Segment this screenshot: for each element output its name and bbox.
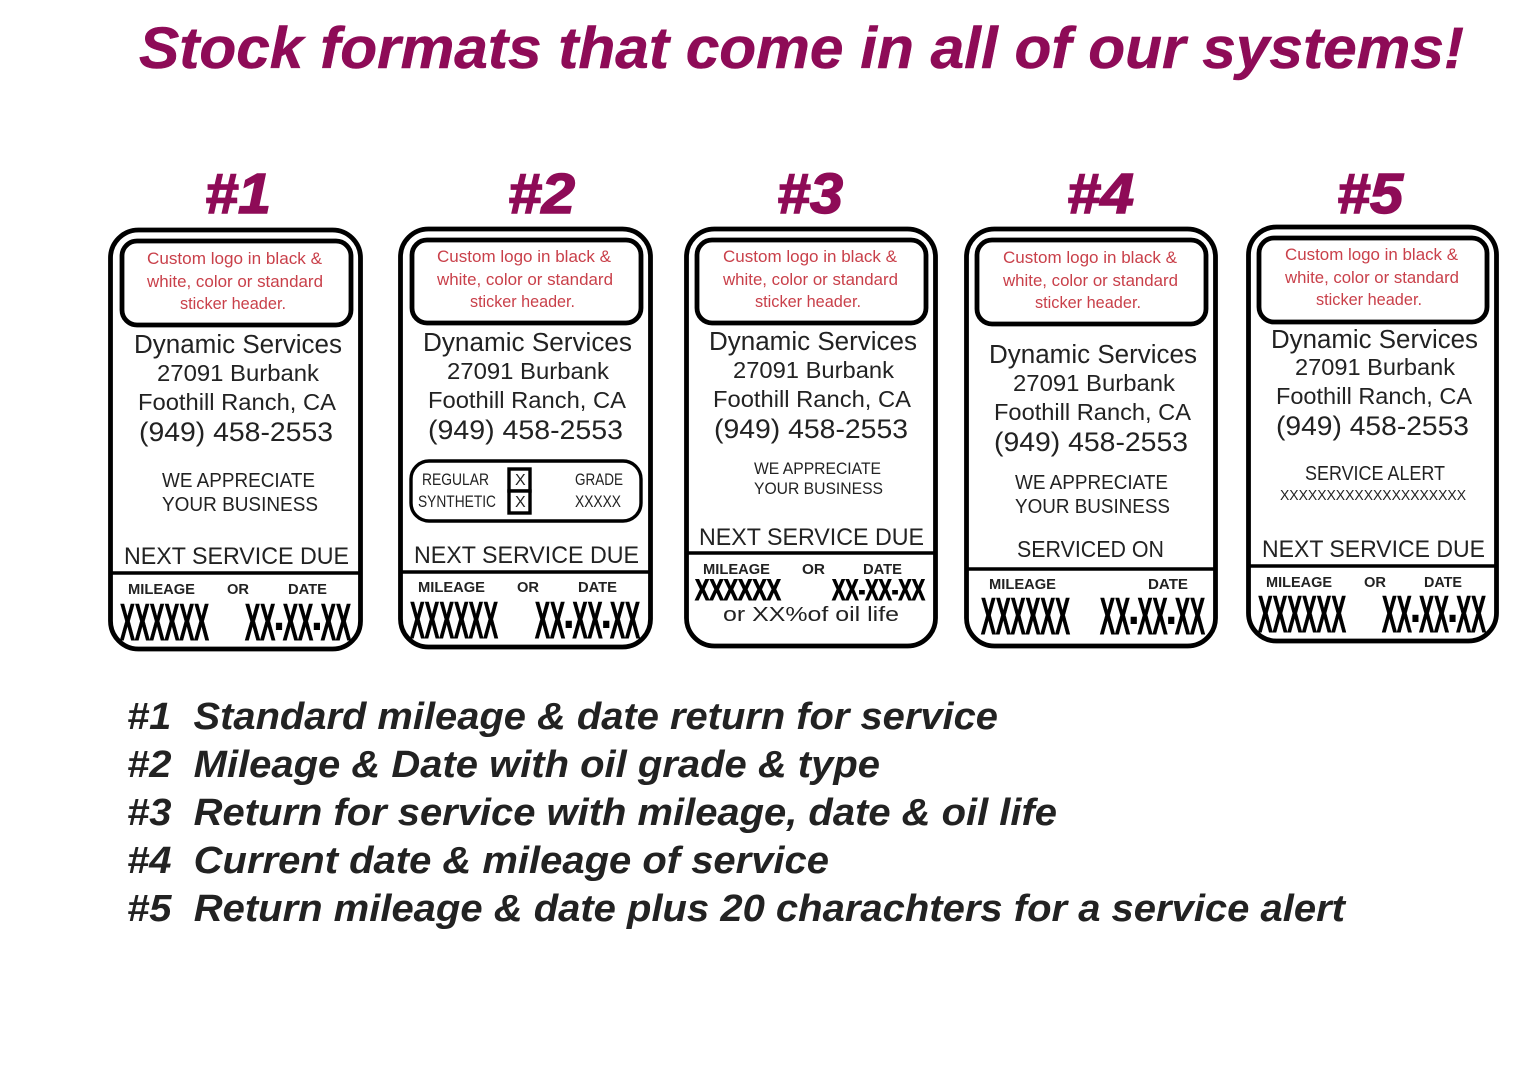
mileage and date: sticker 5: MILEAGE [1266, 575, 1332, 591]
legend: format descriptions: #2 Mileage & Date with oil grade & type [127, 744, 880, 786]
logo box: sticker 2: Custom logo in black & [437, 248, 611, 266]
legend: format descriptions: #4 Current date & mileage of service [127, 840, 829, 882]
mileage and date: sticker 1: DATE [288, 582, 327, 598]
text: XX-XX-XX [245, 594, 351, 652]
logo box: sticker 5: Custom logo in black & [1285, 246, 1458, 264]
mileage and date: sticker 1: XXXXXX [120, 594, 209, 652]
logo box: sticker 4 [977, 240, 1206, 324]
panel: sticker 3 [686, 229, 936, 646]
address block: sticker 4: 27091 Burbank [1013, 370, 1176, 396]
message: sticker 3: WE APPRECIATE [754, 459, 881, 478]
mileage and date: sticker 2: OR [517, 580, 540, 596]
message: sticker 4: YOUR BUSINESS [1015, 496, 1170, 518]
address block: sticker 5: (949) 458-2553 [1276, 411, 1469, 441]
mileage and date: sticker 1: OR [227, 582, 250, 598]
address block: sticker 2: (949) 458-2553 [428, 415, 623, 445]
address block: sticker 3: Foothill Ranch, CA [713, 386, 912, 412]
mileage and date: sticker 5: XXXXXX [1258, 586, 1346, 644]
oil grade box: sticker 2: GRADE [575, 470, 623, 489]
serviced on: sticker 4: SERVICED ON [1017, 536, 1164, 562]
service due: sticker 3: NEXT SERVICE DUE [699, 524, 924, 551]
oil grade box: sticker 2: SYNTHETIC [418, 492, 496, 511]
address block: sticker 5: 27091 Burbank [1295, 354, 1456, 380]
address block: sticker 5: Dynamic Services [1271, 326, 1478, 354]
mileage, date and oil life: sticker 3: XX-XX-XX [832, 574, 925, 607]
legend: format descriptions: #3 Return for service with mileage, date & oil life [127, 792, 1057, 834]
service alert: sticker 5: SERVICE ALERT [1305, 463, 1445, 485]
legend: format descriptions: #1 Standard mileage & date return for service [127, 696, 998, 738]
logo box: sticker 1 [122, 241, 351, 325]
address block: sticker 3 [709, 328, 917, 444]
mileage and date: sticker 4: XXXXXX [981, 588, 1070, 646]
legend: format descriptions [127, 696, 1346, 930]
oil grade box: sticker 2: X [515, 472, 526, 489]
mileage and date: sticker 4: DATE [1148, 577, 1188, 593]
address block: sticker 4: Foothill Ranch, CA [994, 399, 1192, 425]
logo box: sticker 4: white, color or standard [1002, 272, 1178, 290]
mileage and date: sticker 5: OR [1364, 575, 1387, 591]
logo box: sticker 1: white, color or standard [146, 273, 323, 291]
oil grade box: sticker 2: REGULAR [422, 470, 489, 489]
address block: sticker 4 [989, 341, 1197, 457]
panel: sticker 4 [966, 229, 1216, 646]
logo box: sticker 2: sticker header. [470, 293, 575, 311]
logo box: sticker 4: sticker header. [1035, 294, 1141, 312]
address block: sticker 1: Foothill Ranch, CA [138, 389, 337, 415]
mileage, date and oil life: sticker 3: OR [802, 562, 826, 578]
message: sticker 3: YOUR BUSINESS [754, 479, 883, 498]
mileage, date and oil life: sticker 3: or XX%of oil life [723, 604, 899, 626]
service due: sticker 5: NEXT SERVICE DUE [1262, 536, 1485, 563]
message: sticker 1: WE APPRECIATE [162, 470, 315, 492]
address block: sticker 5: Foothill Ranch, CA [1276, 383, 1473, 409]
mileage and date: sticker 2: DATE [578, 580, 617, 596]
service alert: sticker 5: XXXXXXXXXXXXXXXXXXXX [1280, 487, 1466, 504]
address block: sticker 2: Foothill Ranch, CA [428, 387, 627, 413]
logo box: sticker 2: white, color or standard [436, 271, 613, 289]
logo box: sticker 3: sticker header. [755, 293, 861, 311]
text: XX-XX-XX [1100, 588, 1205, 646]
address block: sticker 1 [134, 331, 342, 447]
mileage and date: sticker 5: DATE [1424, 575, 1462, 591]
logo box: sticker 5: sticker header. [1316, 291, 1422, 309]
address block: sticker 2 [423, 329, 632, 445]
title: Stock formats that come in all of our systems! [139, 16, 1464, 81]
mileage, date and oil life: sticker 3: MILEAGE [703, 562, 770, 578]
mileage and date: sticker 2: XXXXXX [410, 592, 498, 650]
oil grade box: sticker 2 [411, 461, 641, 521]
address block: sticker 1: Dynamic Services [134, 331, 342, 359]
heading: format 3: #3 [777, 162, 843, 226]
message: sticker 3 [754, 459, 883, 498]
service alert: sticker 5 [1280, 463, 1466, 504]
panel: sticker 5 [1248, 227, 1496, 644]
logo box: sticker 3: white, color or standard [722, 271, 898, 289]
address block: sticker 3: (949) 458-2553 [714, 414, 908, 444]
address block: sticker 2: 27091 Burbank [447, 358, 610, 384]
heading: format 2: #2 [508, 162, 575, 226]
panel: sticker 1 [110, 230, 360, 652]
message: sticker 1 [162, 470, 318, 516]
service due: sticker 2: NEXT SERVICE DUE [414, 542, 639, 569]
heading: format 1: #1 [205, 162, 271, 226]
logo box: sticker 1: sticker header. [180, 295, 286, 313]
oil grade box: sticker 2: XXXXX [575, 492, 621, 511]
message: sticker 4 [1015, 472, 1170, 518]
mileage, date and oil life: sticker 3: XXXXXX [695, 574, 781, 607]
logo box: sticker 3 [697, 240, 926, 323]
address block: sticker 3: 27091 Burbank [733, 357, 895, 383]
mileage, date and oil life: sticker 3: DATE [863, 562, 902, 578]
heading: format 4: #4 [1067, 162, 1134, 226]
logo box: sticker 4: Custom logo in black & [1003, 249, 1177, 267]
address block: sticker 5 [1271, 326, 1478, 441]
address block: sticker 2: Dynamic Services [423, 329, 632, 357]
mileage and date: sticker 2: MILEAGE [418, 580, 485, 596]
logo box: sticker 5 [1259, 238, 1487, 322]
logo box: sticker 5: white, color or standard [1284, 269, 1459, 287]
panel: sticker 2 [400, 229, 650, 650]
address block: sticker 1: (949) 458-2553 [139, 417, 333, 447]
mileage and date: sticker 4: MILEAGE [989, 577, 1056, 593]
mileage, date and oil life: sticker 3 [695, 562, 925, 626]
message: sticker 1: YOUR BUSINESS [162, 494, 318, 516]
address block: sticker 1: 27091 Burbank [157, 360, 320, 386]
message: sticker 4: WE APPRECIATE [1015, 472, 1168, 494]
logo box: sticker 2 [412, 240, 641, 323]
mileage and date: sticker 1: MILEAGE [128, 582, 195, 598]
address block: sticker 4: Dynamic Services [989, 341, 1197, 369]
logo box: sticker 3: Custom logo in black & [723, 248, 897, 266]
oil grade box: sticker 2: X [515, 494, 526, 511]
text: XX-XX-XX [535, 592, 640, 650]
legend: format descriptions: #5 Return mileage & date plus 20 charachters for a service alert [127, 888, 1346, 930]
address block: sticker 3: Dynamic Services [709, 328, 917, 356]
logo box: sticker 1: Custom logo in black & [147, 250, 322, 268]
heading: format 5: #5 [1337, 162, 1404, 226]
service due: sticker 1: NEXT SERVICE DUE [124, 543, 349, 570]
address block: sticker 4: (949) 458-2553 [994, 427, 1188, 457]
